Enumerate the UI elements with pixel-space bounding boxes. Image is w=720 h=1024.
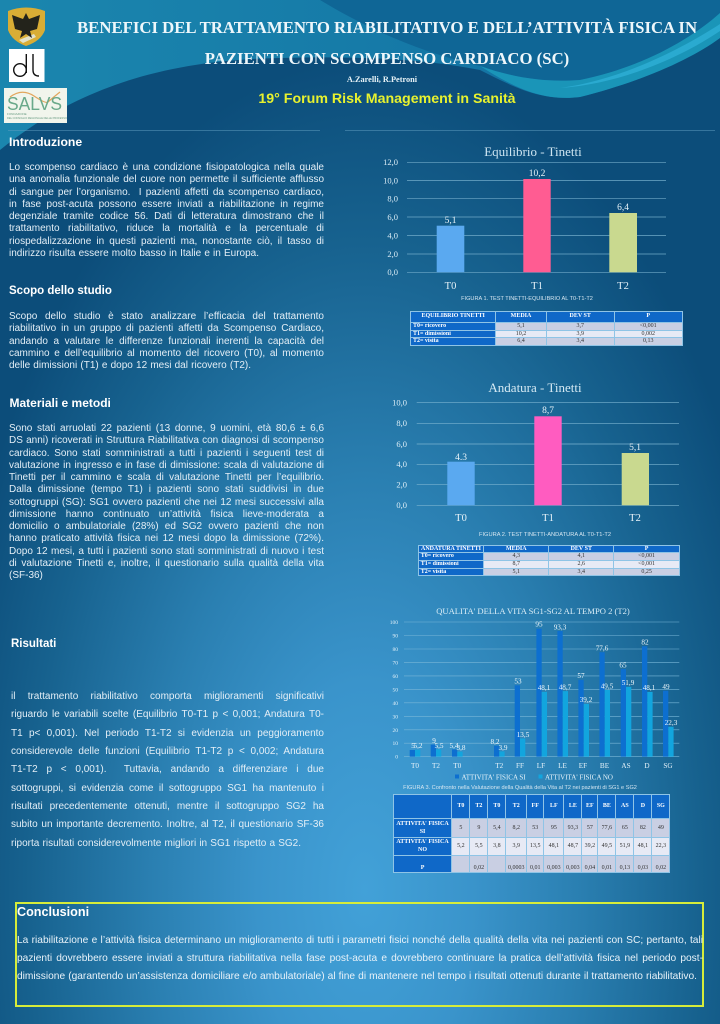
table: confronto qualità della vita: 0,02 [656, 865, 666, 871]
chart: Equilibrio - Tinetti: 10,2 [529, 169, 546, 179]
table: andatura tinetti: ANDATURA TINETTI [421, 546, 481, 552]
text: Materiali e metodi: (SF-36) [9, 570, 43, 581]
chart: qualità della vita: 5,2 [414, 742, 423, 750]
text: Risultati: riguardo le variabili scelte (Equilibrio T0-T1 p < 0,001; Andatura T0- [11, 709, 324, 720]
title: BENEFICI DEL TRATTAMENTO RIABILITATIVO E DELL’ATTIVITÀ FISICA IN [77, 18, 697, 37]
table: confronto qualità della vita: LF [550, 803, 558, 809]
chart: qualità della vita [390, 606, 680, 782]
text: Risultati: risultati precedentemente ottenuti, mentre il sottogruppo SG2 ha [11, 801, 324, 812]
text: Materiali e metodi: Tinetti per il cammino e scala di valutazione Tinetti per l’equilibrio. [9, 472, 324, 483]
text: Introduzione: degenziale tramite codice 56. Dati di letteratura dimostrano che il [9, 211, 324, 222]
text: Introduzione: una anomalia funzionale del cuore non permette il sufficiente afflusso [9, 174, 324, 185]
chart: qualità della vita: LF [537, 762, 545, 770]
chart: qualità della vita: 50 [392, 687, 398, 693]
chart: qualità della vita: 82 [641, 638, 649, 646]
heading: Risultati: Risultati [11, 638, 56, 650]
chart: qualità della vita: T0 [453, 762, 462, 770]
table: andatura tinetti: T0= ricovero [421, 553, 454, 559]
chart: Equilibrio - Tinetti: 8,0 [387, 194, 398, 204]
table: confronto qualità della vita: 5,4 [493, 825, 501, 831]
chart: qualità della vita: 93,3 [554, 624, 567, 632]
chart: qualità della vita: LE [558, 762, 567, 770]
chart: qualità della vita: FF [516, 762, 524, 770]
table: andatura tinetti: T1= dimissioni [421, 561, 459, 567]
table: confronto qualità della vita: ATTIVITA' FISICA SI [396, 821, 449, 835]
table: confronto qualità della vita: 82 [640, 825, 646, 831]
table: andatura tinetti: 2,6 [578, 561, 585, 567]
table: confronto qualità della vita: 3,8 [493, 843, 501, 849]
chart: qualità della vita: T2 [432, 762, 440, 770]
table: andatura tinetti: 4,3 [513, 553, 520, 559]
chart: qualità della vita: ATTIVITA' FISICA SI [462, 774, 526, 782]
chart: qualità della vita: T2 [495, 762, 504, 770]
chart: qualità della vita: 13,5 [517, 731, 530, 739]
text: Scopo dello studio [9, 311, 324, 371]
text: Materiali e metodi: DS anni) ricoverati in Struttura Riabilitativa con diagnosi di scompenso [9, 435, 324, 446]
table: confronto qualità della vita: 53 [532, 825, 538, 831]
table: equilibrio tinetti: <0,001 [640, 323, 657, 329]
table: confronto qualità della vita: 0,01 [602, 865, 612, 871]
heading: Scopo dello studio: Scopo dello studio [9, 285, 112, 297]
text: Risultati: sottogruppi, si evidenzia come il sottogruppo SG1 ha mantenuto i [11, 783, 324, 794]
chart: qualità della vita: 30 [392, 714, 398, 720]
text: Scopo dello studio: cammino e dell’equilibrio al momento del ricovero (T0), al momento [9, 348, 324, 359]
text: Scopo dello studio: andando a valutare le differenze funzionali inerenti la capacità del [9, 336, 324, 346]
text: Materiali e metodi [9, 423, 324, 581]
chart: Andatura - Tinetti: 0,0 [396, 500, 407, 510]
chart: Equilibrio - Tinetti: T1 [531, 281, 543, 292]
text: Materiali e metodi: Dalla dimissione (tempo T1) i pazienti sono stati suddivisi in due [9, 484, 324, 495]
table: confronto qualità della vita: T2 [513, 803, 520, 809]
table: andatura tinetti: T2= visita [421, 569, 446, 575]
caption: figura 1: FIGURA 1. TEST TINETTI-EQUILIBRIO AL T0-T1-T2 [461, 296, 593, 302]
chart: Andatura - Tinetti: T1 [542, 513, 554, 524]
logo: crest [8, 8, 45, 46]
text: Materiali e metodi: di valutazione Tinetti e, inoltre, il questionario sulla qualità della vita [9, 558, 324, 569]
chart: qualità della vita: QUALITA' DELLA VITA SG1-SG2 AL TEMPO 2 (T2) [436, 606, 630, 616]
text: Materiali e metodi: sottogruppi (SG): SG1 ovvero pazienti che nei 12 mesi successivi alla [9, 496, 324, 508]
table: confronto qualità della vita: 8,2 [512, 825, 520, 831]
chart: qualità della vita: 48,1 [538, 684, 551, 692]
chart: Equilibrio - Tinetti: 2,0 [387, 249, 398, 259]
chart: qualità della vita: 49 [662, 683, 670, 691]
table: confronto qualità della vita [393, 794, 670, 873]
caption: figura 3: FIGURA 3. Confronto nella Valutazione della Qualità della Vita al T2 nei pazienti di SG1 e SG2 [403, 785, 637, 791]
chart: Andatura - Tinetti: T0 [455, 513, 467, 524]
chart: qualità della vita: 5,5 [435, 742, 444, 750]
table: confronto qualità della vita: LE [569, 803, 577, 809]
chart: qualità della vita: 65 [619, 662, 627, 670]
table: confronto qualità della vita: 0,04 [585, 865, 595, 871]
table: equilibrio tinetti: 6,4 [517, 338, 525, 344]
chart: qualità della vita: D [644, 762, 650, 770]
table: confronto qualità della vita: 49 [658, 825, 664, 831]
text: Introduzione: indirizzo risulta essere molto basso in Italie e in Europa. [9, 248, 259, 259]
table: equilibrio tinetti: P [646, 313, 650, 319]
table: equilibrio tinetti: 3,7 [576, 323, 584, 329]
heading: Introduzione: Introduzione [9, 135, 82, 149]
table: confronto qualità della vita: T0 [457, 803, 464, 809]
table: equilibrio tinetti: T2= visita [413, 338, 439, 344]
heading: Materiali e metodi: Materiali e metodi [10, 396, 111, 410]
chart: qualità della vita: EF [579, 762, 587, 770]
chart: Andatura - Tinetti: 8,7 [542, 406, 554, 416]
table: andatura tinetti: 5,1 [513, 569, 520, 575]
chart: Equilibrio - Tinetti: T0 [445, 281, 456, 292]
heading: Conclusioni: Conclusioni [17, 905, 89, 919]
table: confronto qualità della vita: SG [657, 803, 665, 809]
text: Materiali e metodi: cardiaco. Sono stati somministrati a tutti i pazienti i seguenti test di [9, 448, 324, 458]
text: Materiali e metodi: hanno praticato attività fisica nei 12 mesi dopo la dimissione (72%). [9, 533, 324, 544]
text: Risultati: il trattamento riabilitativo comporta miglioramenti significativi [11, 691, 324, 702]
table: confronto qualità della vita: 51,9 [620, 843, 630, 849]
chart: Equilibrio - Tinetti: Equilibrio - Tinetti [484, 144, 582, 159]
table: confronto qualità della vita: 48,7 [568, 843, 578, 849]
table: confronto qualità della vita: 48,1 [549, 843, 559, 849]
table: equilibrio tinetti [410, 311, 683, 346]
table: andatura tinetti: <0,001 [638, 561, 655, 567]
table: andatura tinetti: 3,4 [578, 569, 585, 575]
text: Conclusioni: La riabilitazione e l’attività fisica determinano un miglioramento di tutti i parametri fisici nonché della qualità della vita nei pazienti con SC; pertanto, tali [17, 935, 703, 946]
chart: Andatura - Tinetti: 6,0 [396, 439, 407, 449]
table: confronto qualità della vita: T2 [475, 803, 482, 809]
text: Scopo dello studio: Scopo dello studio è stato analizzare l’efficacia del trattamento [9, 311, 324, 322]
table: confronto qualità della vita: 95 [551, 825, 557, 831]
chart: qualità della vita: 40 [392, 701, 398, 707]
chart: qualità della vita: 48,1 [643, 684, 656, 692]
chart: qualità della vita: SG [663, 762, 673, 770]
text: Materiali e metodi: valutazione in ingresso e in fase di dimissione: scala di valutazione di [9, 460, 324, 471]
chart: qualità della vita: AS [621, 762, 631, 770]
logo: Salus [4, 88, 67, 123]
table: confronto qualità della vita: BE [603, 803, 611, 809]
text: Conclusioni [17, 935, 703, 982]
table: andatura tinetti: P [645, 546, 648, 552]
table: confronto qualità della vita: 0,003 [547, 865, 561, 871]
table: confronto qualità della vita: P [421, 865, 424, 871]
chart: qualità della vita: 57 [577, 672, 585, 680]
chart: qualità della vita: 0 [395, 755, 398, 761]
table: confronto qualità della vita: ATTIVITA' FISICA NO [396, 839, 449, 853]
table: equilibrio tinetti: DEV ST [569, 313, 591, 319]
text: Risultati: T1 p< 0,001). Nel periodo T1-T2 si evidenzia un peggioramento [11, 728, 324, 739]
chart: qualità della vita: 3,8 [457, 744, 466, 752]
table: confronto qualità della vita: 5 [459, 825, 462, 831]
background swoosh [0, 0, 720, 150]
chart: qualità della vita: 70 [392, 660, 398, 666]
table: confronto qualità della vita: 0,13 [620, 865, 630, 871]
chart: qualità della vita: T0 [411, 762, 419, 770]
chart: Andatura - Tinetti: 10,0 [392, 398, 407, 408]
logo: Salus: SALVS [6, 94, 62, 114]
text: Materiali e metodi: Dopo 12 mesi, a tutti i pazienti sono stati somministrati di nuovo i test [9, 546, 324, 556]
text: Scopo dello studio: riabilitativo in un gruppo di pazienti affetti da Scompenso Cardiaco, [9, 323, 324, 334]
table: confronto qualità della vita: FF [532, 803, 539, 809]
table: andatura tinetti: DEV ST [571, 546, 592, 552]
chart: qualità della vita: 90 [392, 634, 398, 640]
chart: Equilibrio - Tinetti: 0,0 [387, 267, 398, 277]
chart: Equilibrio - Tinetti: 4,0 [387, 230, 398, 240]
table: confronto qualità della vita: 22,3 [656, 843, 666, 849]
table: confronto qualità della vita: 0,0003 [508, 865, 524, 871]
table: confronto qualità della vita: 57 [587, 825, 593, 831]
table: confronto qualità della vita: AS [621, 803, 629, 809]
chart: qualità della vita: 60 [392, 674, 398, 680]
text: Introduzione: di sangue per l’organismo. I pazienti affetti da scompenso cardiaco, [9, 186, 324, 198]
panel: conclusioni [15, 902, 704, 1007]
table: confronto qualità della vita: 0,02 [474, 865, 484, 871]
text: Introduzione: riospedalizzazione in questi pazienti ma, nonostante ciò, il tasso di [9, 236, 324, 246]
chart: Andatura - Tinetti [392, 380, 679, 524]
chart: qualità della vita: BE [600, 762, 610, 770]
text: Risultati: T1-T2 p < 0,001). Tuttavia, andando a differenziare i due [11, 764, 324, 775]
table: equilibrio tinetti: MEDIA [511, 313, 531, 319]
chart: Equilibrio - Tinetti: 12,0 [383, 157, 398, 167]
chart: qualità della vita: 5,4 [450, 742, 459, 750]
table: confronto qualità della vita: 77,6 [602, 825, 612, 831]
chart: qualità della vita: 10 [392, 741, 398, 747]
text: Introduzione: trattamento riabilitativo, riduce la mortalità e la percentuale di [9, 223, 324, 234]
table: confronto qualità della vita: 13,5 [530, 843, 540, 849]
table: equilibrio tinetti: 3,9 [576, 331, 584, 337]
title [77, 18, 697, 68]
text: Introduzione [9, 162, 324, 259]
table: equilibrio tinetti: 3,4 [576, 338, 584, 344]
table: confronto qualità della vita: 93,3 [568, 825, 578, 831]
chart: qualità della vita: 3,9 [499, 744, 508, 752]
table: confronto qualità della vita: D [641, 803, 645, 809]
text: Introduzione: Lo scompenso cardiaco è una condizione fisiopatologica nella quale [9, 162, 324, 173]
text: Materiali e metodi: domicilio o ambulatoriale (28%) ed SG2 ovvero pazienti che non [9, 521, 324, 532]
chart: qualità della vita: 8,2 [491, 738, 500, 746]
table: equilibrio tinetti: 0,13 [643, 338, 653, 344]
chart: qualità della vita: 9 [432, 737, 436, 745]
caption: figura 2: FIGURA 2. TEST TINETTI-ANDATURA AL T0-T1-T2 [479, 532, 611, 538]
table: equilibrio tinetti: 0,002 [641, 331, 655, 337]
text: Risultati: subito un importante decremento. Inoltre, al T2, il questionario SF-36 [11, 819, 324, 830]
chart: Andatura - Tinetti: 2,0 [396, 480, 407, 490]
text: Risultati [11, 691, 324, 849]
table: confronto qualità della vita: 49,5 [602, 843, 612, 849]
text: Risultati: riporta risultati considerevolmente migliori in SG1 rispetto a SG2. [11, 838, 301, 849]
table: confronto qualità della vita: 65 [622, 825, 628, 831]
table: confronto qualità della vita: T0 [493, 803, 500, 809]
chart: qualità della vita: 39,2 [580, 696, 593, 704]
chart: Andatura - Tinetti: 5,1 [629, 443, 641, 453]
table: confronto qualità della vita: 39,2 [585, 843, 595, 849]
text: Materiali e metodi: Sono stati arruolati 22 pazienti (13 donne, 9 uomini, età 80,6 ± 6,6 [9, 423, 324, 434]
text: Conclusioni: pazienti dovrebbero essere inviati a struttura riabilitativa nella fase post-acuta e dovrebbero continuare la pratica dell’attività fisica nel periodo post- [17, 953, 703, 964]
forum subtitle: 19° Forum Risk Management in Sanità [258, 91, 516, 107]
text: Materiali e metodi: dimissione hanno continuato un’attività fisica lieve-moderata a [9, 509, 324, 520]
table: equilibrio tinetti: 5,1 [517, 323, 525, 329]
table: equilibrio tinetti: T0= ricovero [413, 323, 446, 329]
chart: qualità della vita: 20 [392, 728, 398, 734]
table: equilibrio tinetti: 10,2 [516, 331, 526, 337]
chart: Equilibrio - Tinetti: 6,0 [387, 212, 398, 222]
table: confronto qualità della vita: 0,03 [638, 865, 648, 871]
chart: qualità della vita: ATTIVITA' FISICA NO [545, 774, 613, 782]
table: andatura tinetti [418, 545, 680, 576]
logo: Salus: FONDAZIONE [6, 112, 26, 116]
text: Conclusioni: dimissione (garantendo un’assistenza domiciliare e/o ambulatoriale) al fine di mantenere nel tempo i risultati ottenuti durante il trattamento riabilitativo. [17, 971, 697, 982]
table: andatura tinetti: MEDIA [506, 546, 527, 552]
table: andatura tinetti: 8,7 [513, 561, 520, 567]
table: confronto qualità della vita: EF [586, 803, 594, 809]
chart: Equilibrio - Tinetti: T2 [617, 281, 629, 292]
chart: qualità della vita: 80 [392, 647, 398, 653]
title: PAZIENTI CON SCOMPENSO CARDIACO (SC) [205, 49, 569, 68]
chart: qualità della vita: 51,9 [622, 679, 635, 687]
chart: Equilibrio - Tinetti: 5,1 [445, 216, 457, 226]
chart: Equilibrio - Tinetti: 6,4 [617, 203, 629, 213]
chart: qualità della vita: 53 [514, 678, 522, 686]
chart: Andatura - Tinetti: 4.3 [455, 453, 467, 463]
logo: dl [9, 49, 44, 82]
chart: Andatura - Tinetti: 8,0 [396, 418, 407, 428]
chart: qualità della vita: 100 [390, 620, 398, 626]
authors: A.Zarelli, R.Petroni [347, 75, 417, 84]
chart: Andatura - Tinetti: T2 [629, 513, 641, 524]
text: Scopo dello studio: delle dimissioni (T1) e dopo 12 mesi dal ricovero (T2). [9, 360, 251, 371]
table: equilibrio tinetti: EQUILIBRIO TINETTI [421, 313, 485, 319]
chart: qualità della vita: 77,6 [596, 644, 609, 652]
text: Introduzione: in fase post-acuta possono essere inviati a riabilitazione in regime [9, 199, 324, 210]
chart: Equilibrio - Tinetti: 10,0 [383, 176, 398, 186]
table: confronto qualità della vita: 48,1 [638, 843, 648, 849]
table: confronto qualità della vita: 0,01 [530, 865, 540, 871]
table: confronto qualità della vita: 5,5 [475, 843, 483, 849]
table: confronto qualità della vita: 3,9 [512, 843, 520, 849]
chart: qualità della vita: 22,3 [665, 719, 678, 727]
chart: qualità della vita: 95 [535, 620, 543, 628]
text: Risultati: considerevole delle funzioni (Equilibrio T1-T2 p < 0,002; Andatura [11, 746, 324, 757]
chart: qualità della vita: 49,5 [601, 682, 614, 690]
chart: Andatura - Tinetti: Andatura - Tinetti [488, 380, 582, 395]
chart: Equilibrio - Tinetti [383, 144, 666, 292]
chart: qualità della vita: 48,7 [559, 684, 572, 692]
table: andatura tinetti: <0,001 [638, 553, 655, 559]
table: confronto qualità della vita: 5,2 [457, 843, 465, 849]
table: andatura tinetti: 0,25 [641, 569, 652, 575]
table: confronto qualità della vita: 9 [477, 825, 480, 831]
table: andatura tinetti: 4,1 [578, 553, 585, 559]
chart: Andatura - Tinetti: 4,0 [396, 459, 407, 469]
table: confronto qualità della vita: 0,003 [566, 865, 580, 871]
table: equilibrio tinetti: T1= dimissioni [413, 331, 451, 337]
chart: qualità della vita: 5 [411, 742, 415, 750]
